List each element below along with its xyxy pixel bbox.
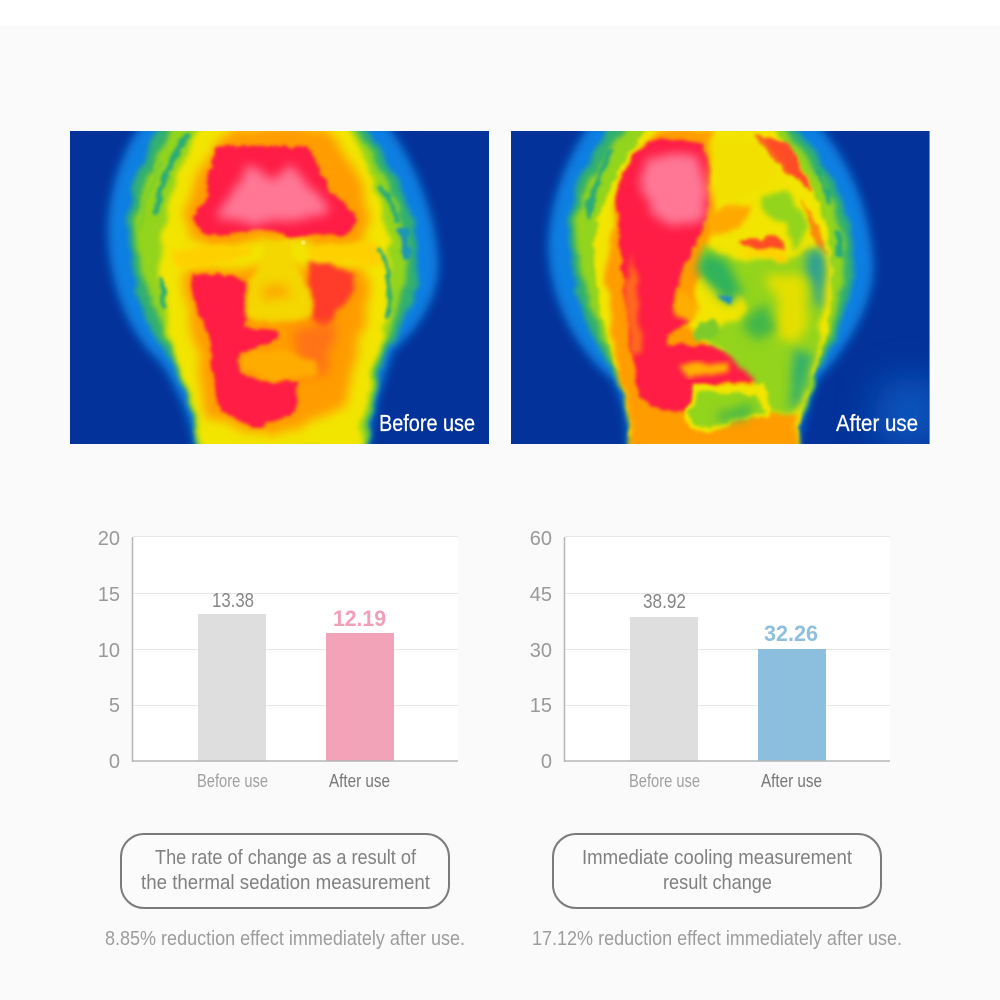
- callout: immediate cooling: result change: [663, 872, 772, 894]
- label: before use: Before use: [379, 410, 475, 436]
- y axis labels: 0: [109, 751, 120, 773]
- callout: thermal sedation: the thermal sedation measurement: [141, 872, 430, 894]
- hair streaks: [588, 150, 840, 253]
- panel: bar chart thermal sedation: [98, 528, 458, 791]
- value: after use: 32.26: [764, 621, 818, 646]
- y axis labels: 10: [98, 640, 120, 662]
- infographic: [70, 131, 930, 949]
- callout: immediate cooling: [553, 834, 881, 908]
- panel: thermal image before use: [70, 123, 489, 450]
- category: after use: After use: [329, 771, 390, 791]
- plot area: [133, 537, 458, 761]
- y axis labels: 45: [530, 584, 552, 606]
- value: after use: 12.19: [333, 606, 386, 631]
- category: before use: Before use: [629, 771, 700, 791]
- callout: thermal sedation: The rate of change as a result of: [155, 847, 416, 869]
- bar: after use: [326, 633, 394, 761]
- y axis labels: [530, 528, 552, 773]
- bar: before use: [630, 617, 698, 761]
- value: before use: 13.38: [212, 590, 254, 612]
- label: after use: After use: [836, 410, 918, 436]
- y axis labels: 15: [98, 584, 120, 606]
- caption: 17.12% reduction: 17.12% reduction effect immediately after use.: [532, 928, 902, 950]
- y axis labels: 0: [541, 751, 552, 773]
- y axis labels: 30: [530, 640, 552, 662]
- y axis labels: 20: [98, 528, 120, 550]
- y axis labels: 15: [530, 695, 552, 717]
- plot area: [565, 537, 890, 761]
- panel: bar chart immediate cooling: [530, 528, 890, 791]
- callout: immediate cooling: Immediate cooling measurement: [582, 847, 852, 869]
- panel: thermal image after use: [511, 123, 947, 450]
- category: before use: Before use: [197, 771, 268, 791]
- bar: before use: [198, 614, 266, 761]
- hair streaks: [138, 137, 407, 317]
- caption: 8.85% reduction: 8.85% reduction effect immediately after use.: [105, 928, 465, 950]
- y axis labels: 5: [109, 695, 120, 717]
- y axis labels: 60: [530, 528, 552, 550]
- value: before use: 38.92: [643, 591, 686, 613]
- callout: thermal sedation: [121, 834, 449, 908]
- bar: after use: [758, 649, 826, 761]
- category: after use: After use: [761, 771, 822, 791]
- lime cool side: [700, 243, 825, 413]
- y axis labels: [98, 528, 120, 773]
